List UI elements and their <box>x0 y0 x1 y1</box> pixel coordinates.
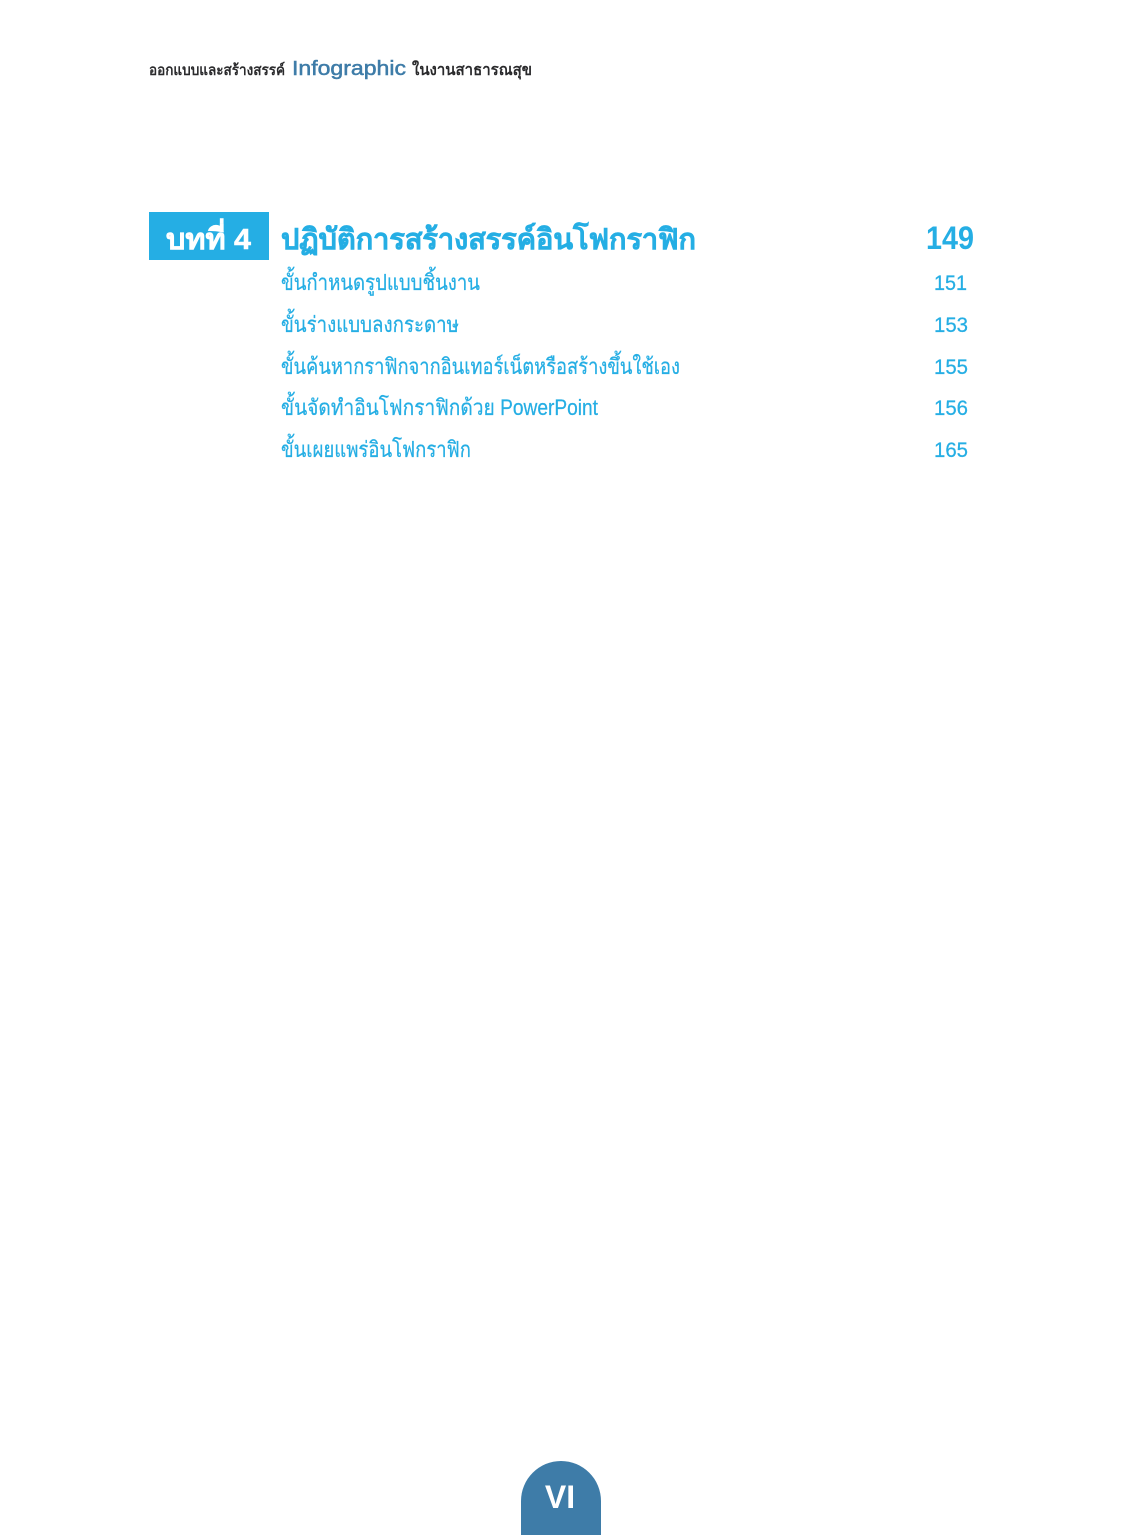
entry 3: 155 <box>934 356 968 379</box>
header text: Infographic: Infographic <box>292 58 406 80</box>
entry 4: ขั้นจัดทำอินโฟกราฟิกด้วย PowerPoint <box>281 392 598 420</box>
entry 3: ขั้นค้นหากราฟิกจากอินเทอร์เน็ตหรือสร้างขึ้นใช้เอง <box>281 351 680 379</box>
entry 5: ขั้นเผยแพร่อินโฟกราฟิก <box>281 434 471 462</box>
table of contents entries <box>281 267 968 462</box>
entry 2: ขั้นร่างแบบลงกระดาษ <box>281 309 459 337</box>
header text: book title start: ออกแบบและสร้างสรรค์ <box>149 61 285 79</box>
entry 5 <box>281 434 968 462</box>
entry 2: 153 <box>934 314 968 337</box>
page number tab: VI <box>545 1479 575 1515</box>
page number tab <box>521 1461 601 1535</box>
entry 2 <box>281 309 968 337</box>
running header <box>149 58 532 80</box>
entry 4: 156 <box>934 397 968 420</box>
entry 5: 165 <box>934 439 968 462</box>
entry 1: ขั้นกำหนดรูปแบบชิ้นงาน <box>281 267 480 296</box>
entry 4 <box>281 392 968 420</box>
entry 3 <box>281 351 968 379</box>
chapter title: ปฏิบัติการสร้างสรรค์อินโฟกราฟิก <box>281 221 696 256</box>
header text: book title end: ในงานสาธารณสุข <box>412 60 532 80</box>
entry 1 <box>281 267 967 296</box>
entry 1: 151 <box>934 272 967 295</box>
chapter badge <box>149 212 269 260</box>
chapter page number: 149 <box>926 220 974 256</box>
chapter badge: บทที่ 4 <box>166 218 251 256</box>
